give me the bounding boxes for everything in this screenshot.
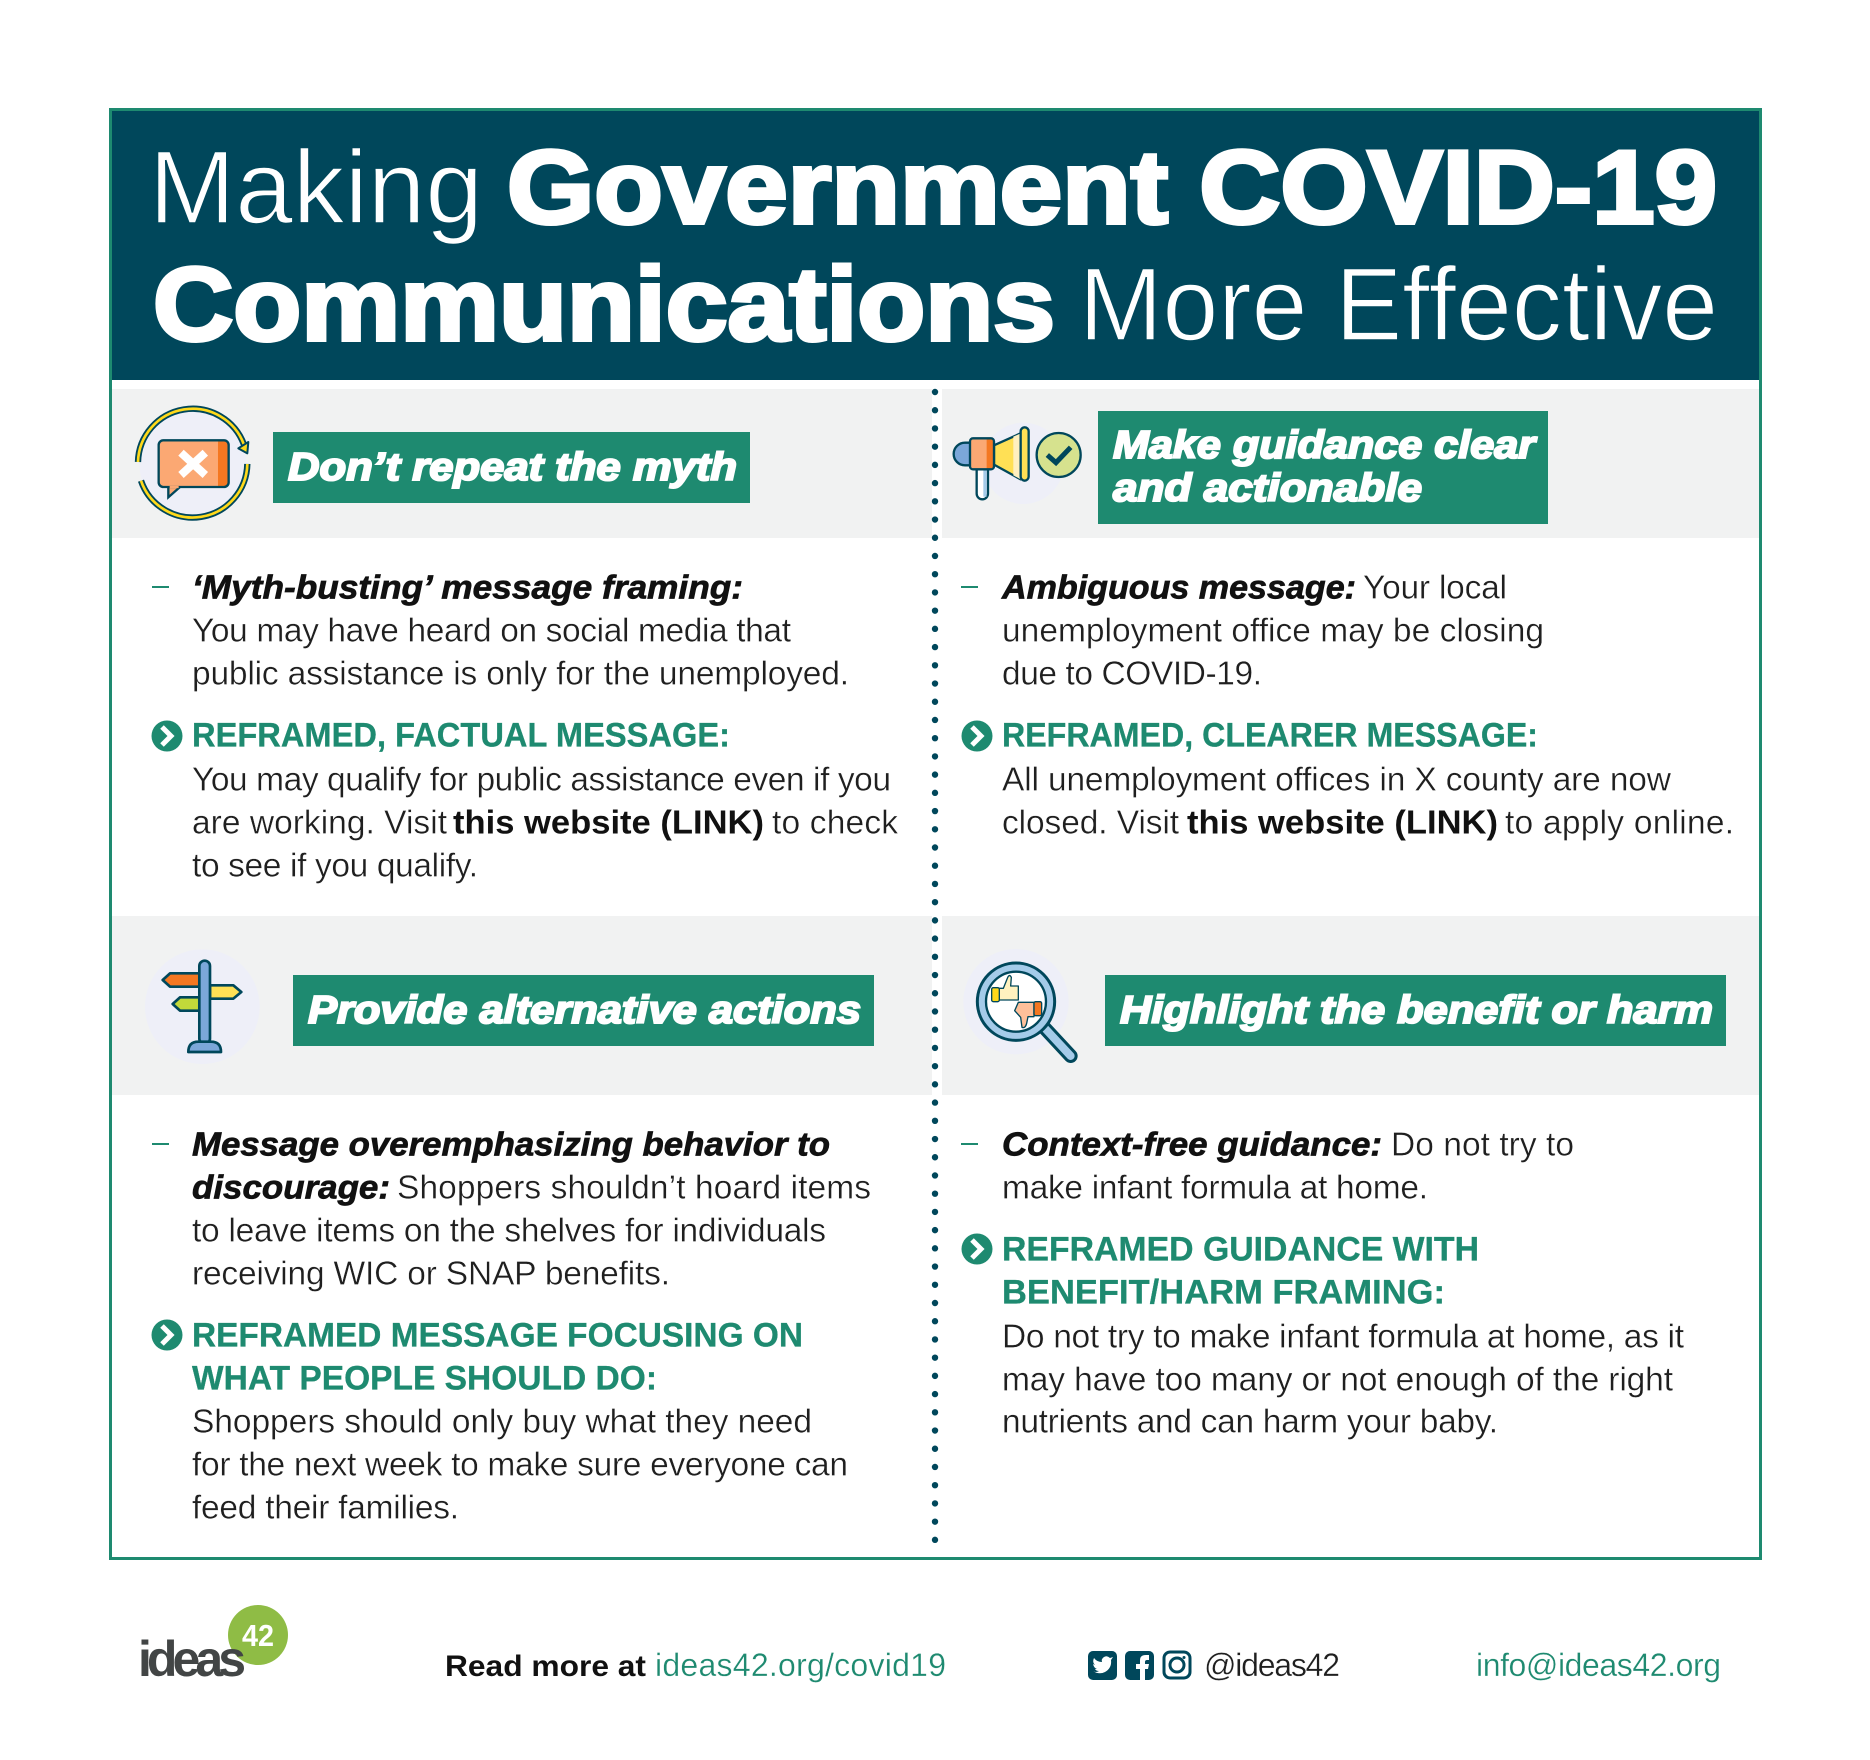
body text: Your local: [1363, 570, 1507, 607]
read more link: [445, 1647, 946, 1683]
logo: ideas42: 42: [242, 1618, 274, 1653]
panel: provide alternative actions: [112, 916, 932, 1526]
panel: highlight the benefit or harm: [942, 916, 1759, 1440]
heading label: and actionable: [1113, 467, 1422, 510]
body text: closed. Visit: [1002, 805, 1180, 842]
body text: Shoppers should only buy what they need: [192, 1404, 812, 1440]
body text: are working. Visit: [192, 805, 448, 842]
body text: You may qualify for public assistance even if you: [192, 762, 891, 799]
main frame: [110, 110, 1760, 1558]
body text: for the next week to make sure everyone can: [192, 1446, 848, 1484]
icon: repeating speech bubble with X: [138, 409, 248, 517]
title banner: [112, 111, 1759, 380]
panel: make guidance clear and actionable: [942, 389, 1759, 842]
body text: to check: [772, 805, 898, 842]
dotted divider: [932, 392, 938, 1541]
social icons: [1088, 1651, 1190, 1680]
icon: twitter: [1088, 1651, 1117, 1680]
body text: Ambiguous message:: [1001, 569, 1356, 606]
body text: Message overemphasizing behavior to: [192, 1126, 830, 1162]
body text: REFRAMED, FACTUAL MESSAGE:: [192, 716, 730, 754]
social handle: @ideas42: [1204, 1647, 1340, 1683]
body text: [961, 1126, 1685, 1440]
body text: this website (LINK): [453, 804, 764, 841]
body text: [961, 569, 1734, 842]
heading label: [1105, 975, 1726, 1046]
body text: public assistance is only for the unemployed.: [192, 656, 849, 693]
body text: BENEFIT/HARM FRAMING:: [1002, 1274, 1445, 1312]
title banner: Government COVID-19: [507, 130, 1717, 246]
title banner: Making: [149, 130, 483, 246]
body text: All unemployment offices in X county are now: [1002, 762, 1672, 799]
body text: this website (LINK): [1187, 804, 1498, 841]
body text: to apply online.: [1505, 805, 1734, 842]
body text: to see if you qualify.: [192, 848, 478, 885]
body text: Context-free guidance:: [1002, 1126, 1382, 1162]
icon: megaphone with check mark: [954, 423, 1081, 504]
icon: signpost: [145, 949, 260, 1064]
bullet: chevron: [962, 720, 992, 752]
title banner: Communications: [153, 247, 1055, 363]
body text: discourage:: [192, 1168, 390, 1206]
panel: don't repeat the myth: [112, 389, 932, 885]
body text: Shoppers shouldn’t hoard items: [397, 1170, 871, 1206]
bullet: chevron: [152, 720, 182, 752]
heading label: [293, 975, 874, 1046]
body text: You may have heard on social media that: [192, 613, 792, 650]
body text: nutrients and can harm your baby.: [1002, 1404, 1498, 1440]
bullet: chevron: [962, 1234, 992, 1264]
heading label: Provide alternative actions: [308, 989, 861, 1032]
read more link: Read more at: [445, 1650, 646, 1683]
heading label: [1098, 411, 1548, 524]
icon: facebook: [1125, 1651, 1154, 1680]
body text: to leave items on the shelves for individuals: [192, 1212, 826, 1250]
body text: REFRAMED GUIDANCE WITH: [1002, 1230, 1479, 1268]
body text: feed their families.: [192, 1490, 459, 1526]
heading label: [273, 432, 750, 503]
body text: REFRAMED, CLEARER MESSAGE:: [1002, 716, 1538, 754]
body text: [152, 1126, 871, 1526]
body text: Do not try to make infant formula at home, as it: [1002, 1318, 1685, 1356]
body text: receiving WIC or SNAP benefits.: [192, 1256, 670, 1292]
body text: due to COVID-19.: [1002, 656, 1262, 693]
body text: REFRAMED MESSAGE FOCUSING ON: [192, 1316, 803, 1354]
icon: magnifying glass with thumbs: [963, 949, 1071, 1056]
heading label: Highlight the benefit or harm: [1120, 989, 1713, 1032]
read more link: ideas42.org/covid19: [655, 1647, 946, 1683]
body text: unemployment office may be closing: [1002, 613, 1544, 650]
body text: may have too many or not enough of the right: [1002, 1362, 1674, 1398]
logo: ideas42: [138, 1605, 288, 1687]
body text: WHAT PEOPLE SHOULD DO:: [192, 1360, 657, 1398]
icon: instagram: [1164, 1652, 1190, 1678]
contact email: info@ideas42.org: [1476, 1647, 1721, 1683]
heading label: Make guidance clear: [1113, 424, 1537, 467]
body text: ‘Myth-busting’ message framing:: [192, 569, 743, 606]
logo: ideas42: ideas: [138, 1631, 246, 1687]
body text: make infant formula at home.: [1002, 1170, 1428, 1206]
body text: Do not try to: [1391, 1126, 1574, 1164]
body text: [152, 569, 898, 885]
title banner: More Effective: [1079, 247, 1718, 363]
heading label: Don’t repeat the myth: [288, 446, 737, 489]
bullet: chevron: [152, 1320, 182, 1350]
footer: [138, 1605, 1721, 1687]
